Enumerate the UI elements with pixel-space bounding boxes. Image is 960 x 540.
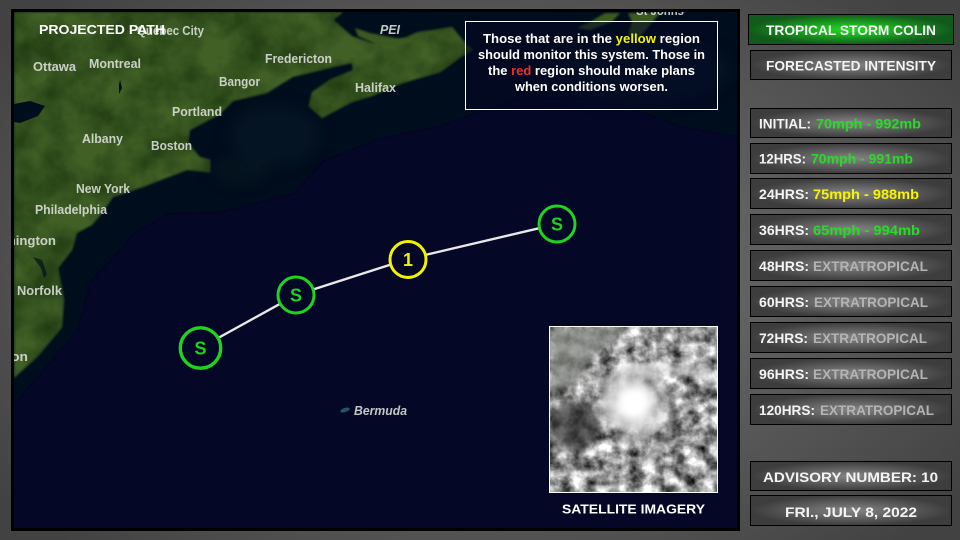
deep ocean [14,12,737,528]
panel: advisory number: ADVISORY NUMBER: 10 [763,469,938,485]
callout line 1: Those that are in the yellow region [483,32,700,46]
panel: advisory number [750,462,952,490]
heading: projected path: PROJECTED PATH [39,22,165,37]
label: Quebec City: Quebec City [137,24,204,38]
row: 96 hours [750,358,952,388]
panel: storm name: TROPICAL STORM COLIN [766,22,936,38]
prince edward island [354,28,406,46]
row: 60 hours: 60HRS: [759,294,809,310]
callout line 4: when conditions worsen. [514,80,668,94]
map frame [11,9,740,531]
row: 48 hours [750,250,952,280]
panel: forecasted intensity heading: FORECASTED INTENSITY [766,58,937,74]
row: 36 hours: 65mph - 994mb [813,222,920,238]
label: Philadelphia: Philadelphia [35,203,108,217]
row: 60 hours: EXTRATROPICAL [814,294,928,310]
row: 12 hours: 70mph - 991mb [811,150,913,166]
marker: tropical storm, 36 hours: S [551,214,563,234]
panel: forecasted intensity heading [750,50,952,80]
shelf tint [210,35,730,182]
label: Bangor: Bangor [219,75,260,89]
satellite image frame [549,326,718,492]
marker: category 1, 24 hours: 1 [403,250,413,270]
row: 48 hours: 48HRS: [759,258,809,274]
northern cloud band [600,368,717,385]
label: Albany: Albany [82,132,123,146]
row: 48 hours: EXTRATROPICAL [813,258,928,274]
row: 36 hours [750,214,952,244]
bermuda island [340,407,350,413]
label: Portland: Portland [172,105,222,119]
row: 60 hours [750,286,952,316]
label: Halifax: Halifax [355,81,396,95]
marker: category 1, 24 hours [390,242,426,278]
spiral rain band [620,371,664,440]
row: initial [750,108,952,138]
row: 24 hours: 24HRS: [759,186,809,202]
row: 72 hours [750,322,952,352]
marker: tropical storm, 12 hours [278,277,314,313]
satellite cloud imagery [549,327,717,492]
marker: tropical storm, initial [180,328,221,368]
storm track line [200,224,557,348]
row: 96 hours: EXTRATROPICAL [813,366,928,382]
storm core [617,386,651,420]
label: New York: New York [76,182,130,196]
marker: tropical storm, 12 hours: S [290,286,302,306]
dark moat to the east [640,395,672,462]
label: Boston: Boston [151,139,192,153]
continental shelf water [14,12,737,403]
map place labels [0,4,684,418]
label: Norfolk: Norfolk [17,284,62,298]
row: initial: 70mph - 992mb [816,116,921,132]
marker: tropical storm, 36 hours [539,206,575,242]
row: 12 hours: 12HRS: [759,150,806,166]
row: 24 hours [750,178,952,208]
callout: regional guidance [466,22,718,110]
panel: storm name [748,14,954,44]
panel: projected path map [0,4,737,528]
row: 96 hours: 96HRS: [759,366,809,382]
lakes and bays [14,12,350,278]
row: 120 hours: 120HRS: [759,402,815,418]
callout line 3: the red region should make plans [488,64,695,78]
row: 72 hours: 72HRS: [759,330,808,346]
label: Bermuda: Bermuda [354,404,407,418]
callout line 2: should monitor this system. Those in [478,48,705,62]
label: Montreal: Montreal [89,57,141,71]
newfoundland [577,13,660,37]
label: Ottawa: Ottawa [33,60,77,74]
outer storm cloud mass [600,377,660,433]
land: northeast North America [14,12,473,378]
flat land haze, upper left [550,327,630,395]
label: Fredericton: Fredericton [265,52,332,66]
row: 120 hours [750,394,952,424]
caption: satellite imagery: SATELLITE IMAGERY [562,502,705,516]
row: 72 hours: EXTRATROPICAL [813,330,927,346]
row: 36 hours: 36HRS: [759,222,809,238]
marker: tropical storm, initial: S [194,338,207,358]
panel: date [750,496,952,526]
panel: date: FRI., JULY 8, 2022 [785,504,917,520]
label: St Johns: St Johns [636,4,684,18]
dark clear air west of storm [549,399,601,451]
land texture [14,12,470,362]
row: 12 hours [750,144,952,174]
row: 120 hours: EXTRATROPICAL [820,402,934,418]
label: PEI: PEI [380,23,401,37]
row: 24 hours: 75mph - 988mb [813,186,919,202]
cloud texture [550,327,717,492]
row: initial: INITIAL: [759,116,811,132]
